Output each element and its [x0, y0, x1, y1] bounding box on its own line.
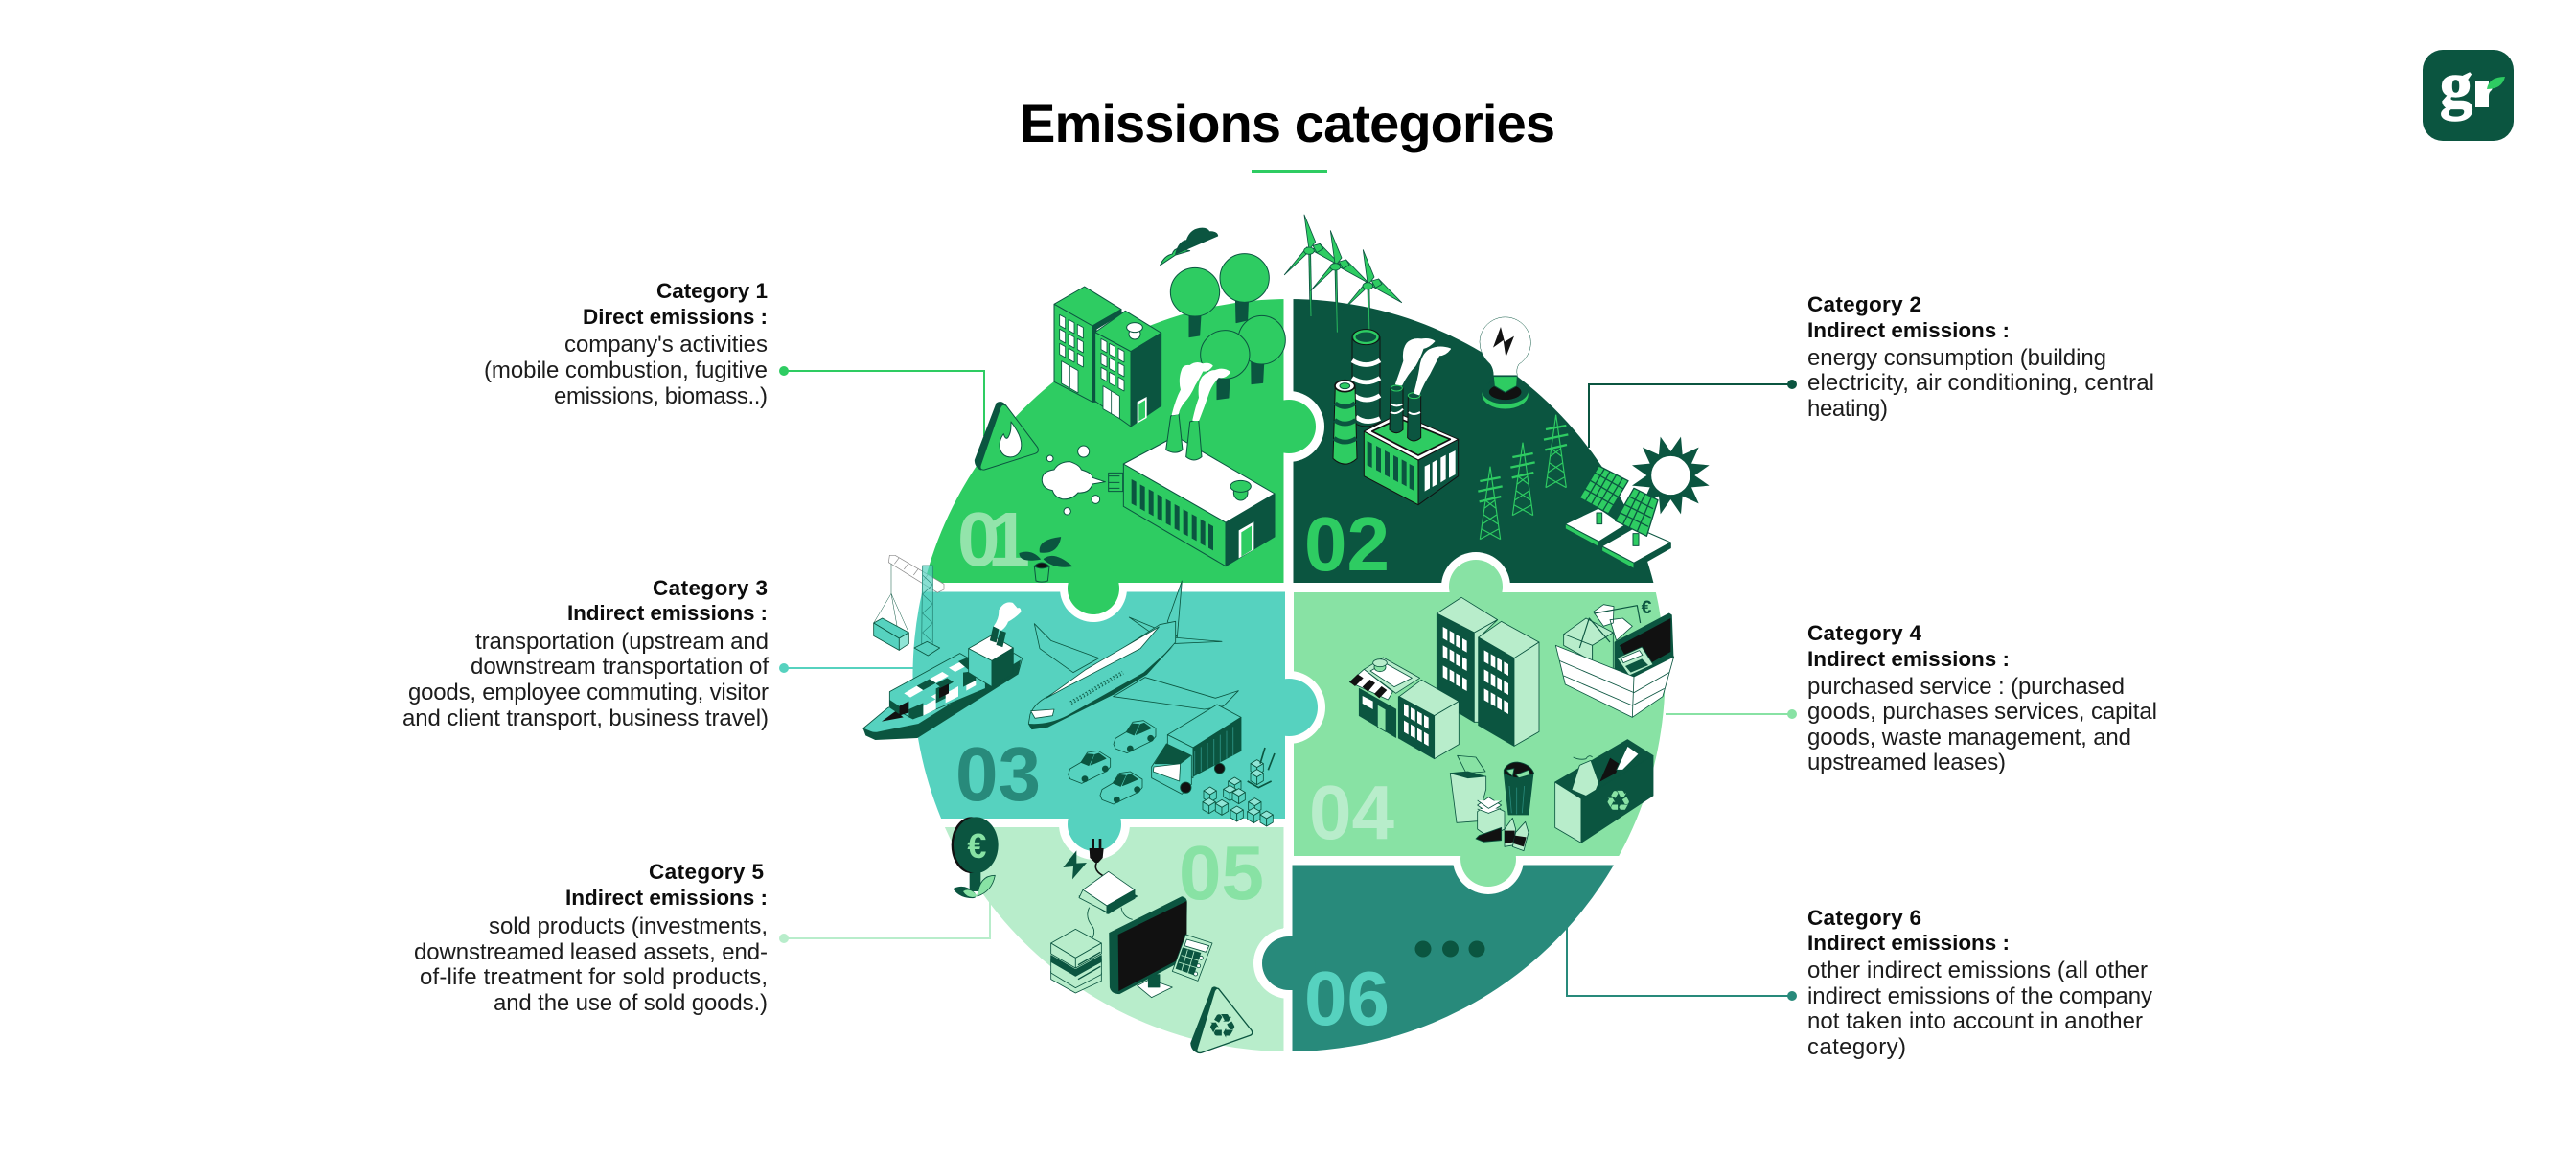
- text block: category 6: other indirect emissions (all other: [1807, 958, 2148, 983]
- illustration: category 5 scene: [952, 817, 1253, 1052]
- text block: category 5: Category 5: [649, 860, 764, 884]
- text block: category 5: sold products (investments,: [489, 913, 768, 939]
- icon: factory: [1123, 363, 1275, 566]
- illustration: category 1 scene: [975, 228, 1285, 582]
- piece: category 6: [1254, 865, 1614, 1051]
- icon: office buildings: [1054, 287, 1162, 427]
- icon: shopping basket: [1555, 598, 1674, 717]
- icon: plug and router: [1063, 839, 1138, 937]
- text block: category 1: (mobile combustion, fugitive: [484, 358, 768, 383]
- icon: office towers: [1437, 597, 1539, 746]
- piece: category 2: [1294, 299, 1654, 583]
- icon: recycling crate: [1555, 740, 1653, 843]
- icon: recycling crate: ♻: [1605, 786, 1631, 820]
- icon: shop building: [1349, 658, 1459, 759]
- text block: category 2: energy consumption (building: [1807, 345, 2106, 371]
- text block: category 4: Indirect emissions :: [1807, 647, 2010, 671]
- piece: category 4: [1294, 552, 1666, 894]
- text block: category 2: Category 2: [1807, 292, 1921, 316]
- piece: category 5: 05: [1179, 830, 1264, 915]
- icon: potted plant: [1020, 538, 1071, 582]
- icon: calculator: [1172, 935, 1212, 981]
- text block: category 1: Category 1: [656, 279, 768, 303]
- text block: category 1: company's activities: [564, 332, 768, 358]
- icon: waste bins and bottles: [1450, 755, 1534, 851]
- text block: category 5: of-life treatment for sold products,: [420, 964, 768, 990]
- text block: category 1: emissions, biomass..): [554, 383, 768, 409]
- text block: category 3: transportation (upstream and: [475, 629, 769, 655]
- text block: category 1: [484, 279, 768, 409]
- icon: wind turbines: [1284, 215, 1402, 352]
- puzzle circle: [912, 299, 1666, 1051]
- icon: light bulb: [1480, 317, 1530, 409]
- text block: category 4: Category 4: [1807, 621, 1921, 645]
- icon: cloud: [1161, 228, 1218, 266]
- piece: category 4: 04: [1309, 770, 1394, 855]
- connector: category 6: [1567, 928, 1796, 1000]
- text block: category 2: Indirect emissions :: [1807, 318, 2010, 342]
- icon: delivery truck: [1152, 705, 1241, 794]
- icon: airplane: [1028, 581, 1238, 729]
- logo: g: [2440, 48, 2472, 121]
- infographic canvas: [403, 50, 2514, 1059]
- text block: category 3: Indirect emissions :: [567, 601, 768, 625]
- icon: shopping basket: €: [1642, 598, 1652, 618]
- text block: category 4: purchased service : (purchased: [1807, 674, 2125, 700]
- connector: category 3: [780, 664, 920, 672]
- icon: cars: [1069, 721, 1156, 804]
- text block: category 6: indirect emissions of the company: [1807, 983, 2152, 1009]
- icon: electricity pylons: [1478, 415, 1568, 540]
- icon: computer monitor: [1110, 897, 1186, 998]
- icon: trees: [1170, 254, 1285, 400]
- connector: category 4: [1666, 710, 1796, 718]
- text block: category 2: electricity, air conditioning, central: [1807, 370, 2154, 396]
- piece: category 5: [945, 827, 1284, 1051]
- text block: category 2: heating): [1807, 396, 1888, 422]
- piece: category 3: [912, 592, 1325, 860]
- piece: category 2: 02: [1304, 501, 1390, 587]
- text block: category 5: and the use of sold goods.): [494, 990, 768, 1016]
- illustration: category 3 scene: [863, 555, 1275, 826]
- connector: category 5: [780, 896, 990, 942]
- icon: parcels: [1203, 748, 1275, 826]
- icon: euro plant: [952, 817, 999, 898]
- piece: category 1: [927, 299, 1324, 622]
- text block: category 6: Category 6: [1807, 906, 1921, 930]
- text block: category 3: goods, employee commuting, visitor: [408, 680, 769, 705]
- text block: category 5: downstreamed leased assets, end-: [414, 939, 768, 965]
- text block: category 3: [402, 576, 769, 731]
- text block: category 5: [414, 860, 768, 1016]
- icon: euro plant: €: [967, 826, 986, 866]
- text block: category 4: [1807, 621, 2157, 775]
- text block: category 2: [1807, 292, 2154, 422]
- piece: category 3: 03: [955, 731, 1041, 817]
- text block: category 5: Indirect emissions :: [565, 886, 768, 910]
- title: Emissions categories: [1020, 93, 1555, 153]
- icon: recycling triangle: ♻: [1208, 1008, 1237, 1047]
- piece: category 1: 01: [957, 497, 1030, 582]
- icon: thought cloud: [1042, 446, 1123, 515]
- title underline: [1252, 170, 1327, 173]
- text block: category 4: goods, waste management, and: [1807, 725, 2131, 751]
- text block: category 3: Category 3: [653, 576, 768, 600]
- text block: category 6: not taken into account in another: [1807, 1008, 2143, 1034]
- text block: category 6: Indirect emissions :: [1807, 931, 2010, 955]
- icon: recycling triangle: [1191, 987, 1253, 1052]
- icon: server stack: [1051, 929, 1101, 993]
- text block: category 6: [1807, 906, 2152, 1060]
- text block: category 1: Direct emissions :: [583, 305, 768, 329]
- illustration: category 2 scene: [1284, 215, 1710, 568]
- icon: sun: [1632, 437, 1710, 514]
- illustration: category 4 scene: [1349, 597, 1674, 851]
- text block: category 3: downstream transportation of: [471, 654, 769, 680]
- connector: category 2: [1589, 381, 1796, 448]
- text block: category 3: and client transport, business travel): [402, 705, 769, 731]
- text block: category 4: upstreamed leases): [1807, 750, 2006, 775]
- icon: fire warning triangle: [975, 402, 1038, 470]
- text block: category 6: category): [1807, 1034, 1906, 1060]
- icon: power plant: [1333, 330, 1459, 505]
- piece: category 6: 06: [1304, 956, 1390, 1041]
- icon: cargo ship: [863, 603, 1023, 740]
- logo: [2423, 48, 2514, 141]
- icon: solar panels: [1565, 466, 1670, 568]
- icon: port crane with container: [874, 555, 944, 656]
- text block: category 4: goods, purchases services, capital: [1807, 699, 2157, 725]
- connector: category 1: [780, 367, 984, 436]
